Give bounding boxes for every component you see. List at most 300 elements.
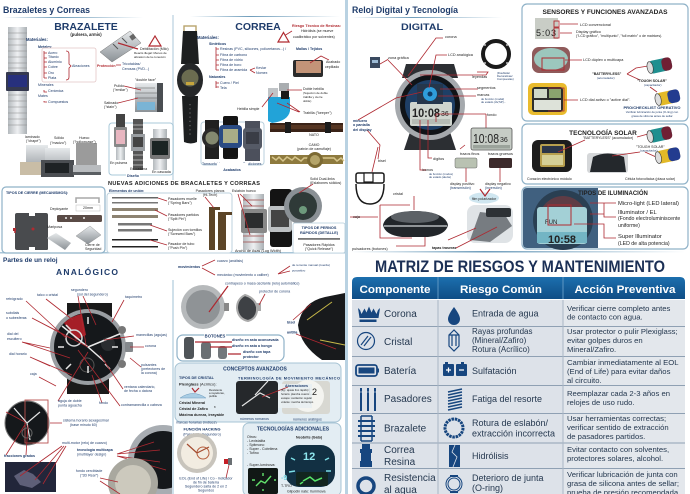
labels: analog watch parts: de fecha o datora	[124, 389, 152, 393]
text: Resistencia al agua: Resistencia	[384, 473, 436, 484]
leader lines: illumination	[574, 203, 616, 238]
text: debilitación	[134, 47, 169, 59]
icon: positive display	[450, 158, 477, 190]
table header: Componente	[360, 284, 430, 296]
icon: arabic numeral watch: 12	[307, 387, 317, 397]
heading: TIPOS DE ILUMINACIÓN	[578, 189, 648, 197]
icon: double face bracelet: Satinado	[104, 101, 118, 105]
icon: black resin watch	[177, 26, 203, 144]
icon: camo strap: CAMO	[309, 143, 320, 147]
diagram: alloys bracket	[42, 48, 121, 102]
text: materials list: Tricotaldas/	[122, 62, 140, 66]
table header: Acción Preventiva	[574, 284, 676, 296]
text: evitar: Evitar contacto con solventes,	[567, 445, 669, 454]
text: tipos de cristal: Cristal Mineral	[179, 401, 205, 405]
icon: NATO strap: NATO	[309, 133, 319, 137]
text: herramientas: verificar sentido de extracción	[567, 423, 669, 432]
text: materials list: Materiales:	[26, 37, 48, 42]
icon: blue strap with buckle: doble)	[303, 99, 311, 103]
icon: spring	[448, 389, 462, 410]
text: strap materials list: Nomex	[256, 71, 268, 75]
text: materials list: Cerosas (PVD...)	[122, 67, 149, 71]
text: tough solar label	[636, 145, 665, 157]
labels: digital watch parts: del display	[353, 128, 372, 132]
panel: diseño watches: En cascada	[152, 170, 171, 174]
icon: camo strap: (patrón de camuflaje)	[297, 147, 331, 151]
text: illumination types: uniforme)	[618, 223, 640, 229]
panel: finishes with three watches: Tamsorfoide	[202, 162, 222, 166]
icon: screw bars: ("Screwed Bars")	[168, 232, 195, 236]
icon: warning triangle	[149, 36, 161, 46]
icon: link watch	[131, 119, 145, 170]
text: verificar lubricación: grasa de silicona antes de sellar;	[567, 479, 679, 488]
labels: analog watch parts: escultero	[7, 337, 22, 341]
icon: multi-motor movement photo	[5, 441, 107, 492]
text: illumination types: (LED de alta potencia)	[618, 241, 670, 247]
icon: black digital watch	[202, 120, 222, 159]
icon: negative display: (inversión)	[485, 186, 502, 190]
panel: correa	[177, 21, 344, 172]
icon: butterfly clasp: Mariposa	[47, 225, 63, 229]
text: herramientas	[567, 414, 669, 441]
icon: case ring	[358, 478, 374, 494]
labels: digital watch parts: o pantalla	[353, 123, 371, 127]
text: rayas: Rayas profundas	[472, 327, 532, 336]
icon: duplex LCD watch	[532, 47, 624, 73]
icon: hacking watch	[177, 433, 232, 478]
text: movement tree: mecánico (movimiento o calibre)	[217, 273, 269, 277]
text: movement tree: cuarzo (análisis)	[217, 259, 243, 263]
analog leader lines	[22, 296, 144, 406]
text: materials list: Cerámica	[48, 89, 63, 93]
panel: analog watch anatomy	[4, 288, 345, 494]
heading: TIPOS DE CIERRE (MECANISMOS):	[6, 191, 68, 195]
icon: flat bars: (Hi-Tech)	[203, 193, 217, 197]
subheading: pulsera, armis: (pulsera, armis)	[70, 32, 102, 37]
labels: button designs: diseño con tapa	[243, 350, 271, 354]
heading: SENSORES Y FUNCIONES AVANZADAS	[542, 10, 668, 16]
icon: dark watch close-up: antilla	[287, 330, 298, 334]
panel: diseño watches: En pulsera	[110, 161, 127, 165]
text: reemplazar: relojes de uso rudo.	[567, 398, 635, 407]
text: strap materials list: Fibra de boro	[220, 63, 241, 67]
text: batteryless label: "BATTERYLESS" (acumulador)	[583, 136, 633, 140]
subheading: Elementos de unión:	[109, 189, 144, 193]
text: sulfatación: Sulfatación	[472, 366, 517, 376]
text: EOL: de fin de batería	[193, 480, 219, 484]
text: debilitación: Reacts illegal: Menos de	[134, 51, 167, 55]
icon: blue strap with buckle: trabilla y cierre	[303, 95, 323, 99]
text: strap materials list: Kevlar	[256, 66, 267, 70]
icon: 3D rear watch: fondo cerciblade	[76, 469, 102, 473]
icon: black rubber watch	[268, 189, 292, 247]
callout: aberraciones	[262, 384, 314, 408]
row: pasadores	[360, 388, 670, 411]
label: neobrite: Neobrite (Gato)	[296, 436, 323, 440]
icon: digital rectangular watch	[150, 129, 170, 170]
text: materials list: Compuestos	[48, 100, 68, 104]
icon: sexagesimal watch: sistema horario sexagesimal	[63, 418, 109, 422]
icon: illuminated watch photo	[523, 188, 598, 250]
heading: terminología: TERMINOLOGÍA DE MOVIMIENTO MECÁNICO	[238, 376, 340, 380]
icon: conventional LCD: ("LCD gráfico", "multipunto", "full matrix" o de matrices).	[576, 34, 662, 38]
icon: push pins: ("Push Pin")	[168, 246, 187, 250]
heading: BRAZALETE: BRAZALETE	[54, 21, 118, 33]
callout: aberraciones: (fig.: ajuste fino rápido)	[281, 388, 308, 392]
text: strap materials list: Sintéticos	[209, 42, 226, 46]
icon: battery	[356, 365, 379, 376]
labels: analog watch parts: retrógrado	[6, 297, 23, 301]
labels: analog watch parts: punta aguacha	[58, 404, 82, 408]
text: rayas	[472, 327, 532, 354]
panel: tecnologías adicionales	[243, 423, 341, 494]
text: EOL: Segundos	[198, 488, 214, 492]
icon: brushed strap end	[293, 56, 340, 77]
label: T-25: -9	[281, 475, 287, 482]
icon: chronograph watch	[50, 303, 133, 394]
text: hidrólisis: Hidrólisis	[472, 451, 509, 461]
icon: button photos	[184, 337, 241, 359]
icon: grey square watch	[243, 121, 262, 161]
text: batteryless label	[558, 134, 648, 152]
text: tough solar label: "TOUGH SOLAR"	[636, 145, 665, 149]
labels: case parts	[352, 192, 456, 251]
icon: conventional LCD: Display gráfico	[576, 30, 601, 34]
text: other technologies: Otros:	[247, 435, 257, 439]
table header	[352, 277, 685, 299]
text: other technologies: - Super-luminova:	[247, 463, 275, 467]
row: corona	[358, 304, 671, 325]
icon: screw bars: Sujeción con tornillos	[168, 228, 202, 232]
row: correa resina	[360, 444, 669, 468]
panel: tipos de cierre	[2, 187, 105, 253]
label: T-25: T-TRO	[281, 484, 292, 488]
row: cristal	[358, 327, 678, 354]
heading: Reloj Digital y Tecnología: Reloj Digital y Tecnología	[352, 5, 459, 15]
text: verificar cierre: de contacto con agua.	[567, 312, 643, 322]
heading: TECNOLOGÍAS ADICIONALES	[257, 424, 330, 432]
labels: analog watch parts: dial horario	[9, 352, 27, 356]
labels: digital watch parts: dígitos	[433, 157, 444, 161]
icon: round solid link watch	[284, 177, 341, 225]
panel: diseño watches: Diseño	[127, 174, 140, 178]
text: strap materials list: Tela	[220, 86, 227, 90]
text: strap materials list: Cuero / Piel	[220, 81, 239, 85]
panel: finishes with three watches	[201, 116, 264, 172]
text: tipos de cristal: 8	[214, 405, 216, 409]
labels: digital watch parts: LCD analógica	[448, 53, 474, 57]
text: EOL: Segundero salta de 2 en 2	[185, 484, 227, 488]
label: lug width: Ancho de Asas (Lug Width)	[235, 249, 282, 253]
labels: digital watch parts: leyendas	[472, 75, 487, 79]
icon: flat bars	[196, 189, 232, 250]
text: strap materials list: Fibra de carbono	[220, 53, 247, 57]
text: risk note	[284, 24, 341, 39]
icon: crystal circle	[358, 332, 374, 350]
icon: detail display: trazos finos	[460, 152, 480, 156]
icon: duplex LCD watch: LCD dúplex o multicapa	[583, 58, 624, 62]
text: checklist: Verificar lubricación de junta (O-ring) con	[626, 110, 679, 114]
text: cambiar: al circuito.	[567, 376, 602, 385]
icon: spring bars: Pasadores muelle	[168, 197, 197, 201]
text: materials list: Aleaciones	[72, 64, 90, 68]
text: Brazalete: Brazalete	[384, 424, 427, 434]
text: reemplazar: Reemplazar cada 2-3 años en	[567, 389, 670, 398]
icon: negative display	[485, 158, 512, 190]
callout: aberraciones: horario: plancha cuarzo	[281, 392, 310, 396]
text: tough solar	[637, 79, 667, 92]
icon: hollow link bracelet watch	[232, 189, 267, 250]
icon: bracelet links	[100, 31, 141, 62]
icon: caseback photo	[448, 205, 513, 248]
icon: arabic numeral watch: números arábigos	[293, 418, 322, 422]
callout: aberraciones: volante: marcha del tiempo	[281, 400, 314, 404]
text: Entrada de agua: Entrada de agua	[472, 308, 539, 318]
text: other technologies: - Lexistalita	[247, 439, 265, 443]
table header: Riesgo Común	[460, 284, 542, 296]
icon: case side view	[350, 196, 448, 246]
icon: sexagesimal watch: grados	[23, 454, 35, 458]
icon: camo strap	[270, 143, 344, 168]
labels: button designs: protector	[243, 355, 259, 359]
panel: digital watch anatomy	[350, 35, 514, 251]
labels: analog watch parts: (pretectores de	[141, 367, 165, 371]
icon: safety clasp	[76, 226, 101, 251]
icon: neobrite dial: 12	[303, 451, 315, 463]
icon: 3D rear watch: ("3D Rear")	[80, 474, 98, 478]
labels: analog watch parts: dial del	[7, 332, 19, 336]
labels: digital watch parts: de función (modal)	[481, 97, 504, 101]
text: materials list: Cobre	[48, 65, 58, 69]
panel: nuevas adiciones	[107, 177, 345, 253]
icon: split pins: ("Split Pin")	[168, 217, 186, 221]
labels: digital watch parts: fondo	[487, 113, 497, 117]
heading: ANALÓGICO: ANALÓGICO	[56, 266, 118, 277]
text: usar protector: evitar golpes duros en	[567, 336, 643, 345]
labels: analog watch parts: fondo	[99, 401, 108, 405]
text: Corona: Corona	[384, 309, 417, 320]
icon: photovoltaic cell	[587, 152, 675, 181]
panel: conceptos avanzados	[175, 363, 341, 424]
labels: button designs: diseño en asta aconcavada	[232, 338, 280, 342]
text: rayas: Rotura (Acrílico)	[472, 345, 530, 354]
icon: split pins	[112, 208, 199, 221]
row: batería	[356, 358, 679, 385]
labels: analog watch parts: (sol del segundero)	[77, 292, 108, 296]
icon: bracelet links	[358, 416, 375, 441]
text: usar protector: Mineral/Zafiro.	[567, 345, 616, 354]
icon: sexagesimal watch	[4, 400, 109, 458]
icon: warning triangle	[278, 32, 289, 42]
icon: multilayer watch: tecnología multicapa	[77, 448, 114, 452]
panel: tipos de pernos: ("Quick Release")	[305, 247, 333, 251]
text: risk note: Hidrólisis (se mueve	[301, 29, 333, 33]
text: materials list: Protección	[97, 64, 116, 68]
panel: finishes with three watches: Lexoth	[227, 156, 238, 160]
icon: flat bars: Pasadores planos	[196, 189, 225, 193]
icon: blue strap with buckle: Hebilla simple	[237, 107, 259, 111]
icon: solar module watch: Corazón electrónico módulo	[527, 177, 572, 181]
text: other technologies	[247, 435, 277, 467]
labels: digital watch parts: de función (modos)	[429, 172, 453, 176]
text: strap materials list: Fibra de aramida	[220, 68, 247, 72]
text: rotura	[472, 418, 555, 438]
text: other technologies: - Tofino	[247, 451, 259, 455]
icon: laminated, solid and hollow bracelets: laminado	[25, 135, 40, 139]
icon: deployante strap: Deployante	[50, 207, 68, 211]
text: cambiar: Cambiar inmediatamente al EOL	[567, 358, 679, 367]
icon: positive display: (transmisión)	[450, 186, 471, 190]
text: tipos de cristal: pulible	[209, 394, 218, 398]
icon: bezel ring	[483, 41, 509, 67]
labels: button designs: diseño en asta a hongo	[232, 344, 273, 348]
labels: analog watch parts: o subesferas	[6, 316, 27, 320]
icon: sexagesimal watch: (base minuto 60)	[70, 423, 97, 427]
text: other technologies: - Spitmono	[247, 443, 264, 447]
labels: analog watch parts	[6, 288, 167, 408]
heading: TECNOLOGÍA SOLAR	[569, 128, 637, 137]
icon: superluminova dial	[248, 468, 278, 494]
panel: tipos de iluminación	[522, 187, 688, 250]
panel: función hacking	[175, 424, 241, 494]
text: verificar lubricación: Verificar lubricación de junta con	[567, 470, 678, 479]
icon: safety clasp: Seguridad	[85, 247, 101, 251]
text: materials list: Plata	[48, 76, 56, 80]
labels: case parts: caja	[353, 215, 361, 219]
text: batteryless	[592, 66, 648, 80]
text: Pasadores: Pasadores	[384, 394, 432, 405]
heading: FUNCIÓN HACKING	[184, 426, 220, 432]
panel: brazalete	[6, 21, 173, 178]
labels: case parts: cristal	[393, 192, 403, 196]
icon: butterfly clasp shape	[13, 213, 48, 250]
icon: detail display: 10:08	[473, 131, 499, 146]
icon: roman numeral watch	[236, 381, 278, 421]
icon: active dial watch: LCD dial activo o "active dial".	[580, 98, 630, 102]
panel: tecnología solar	[522, 124, 688, 184]
panel: finishes with three watches: Acabados	[223, 168, 241, 172]
callout: aberraciones: escape: oscilación regular	[281, 396, 312, 400]
text: strap materials list: Naturales	[209, 75, 225, 79]
icon: double face bracelet: ("emilar")	[113, 88, 128, 92]
icon: blue strap with buckle	[237, 83, 332, 123]
panel: diseño watches	[109, 114, 173, 178]
icon: detail display	[460, 128, 513, 156]
icon: pink dial watch	[114, 114, 127, 160]
labels: digital watch parts: bisel	[378, 159, 386, 163]
icon: photovoltaic cell: Célula fotovoltaica (placa solar)	[625, 177, 675, 181]
icon: brushed strap end: Acabado	[326, 60, 340, 64]
icon: laminated, solid and hollow bracelets: ("hollowcase")	[73, 140, 96, 144]
labels: digital watch parts: marcas	[477, 93, 490, 97]
icon: positive display: display positivo	[450, 182, 474, 186]
text: fatiga: Fatiga del resorte	[472, 394, 542, 404]
icon: arabic numeral watch	[282, 380, 330, 422]
panel: tipos de pernos	[293, 223, 345, 253]
labels: analog watch parts: subdials	[6, 311, 19, 315]
labels: case parts: tapas traseras	[432, 246, 456, 250]
icon: split pins: Pasadores partidos	[168, 213, 199, 217]
labels: button designs	[232, 338, 280, 359]
text: materials list: Oro	[48, 71, 54, 75]
text: tipos de cristal: marcas horarias (índices)	[176, 420, 217, 424]
text: rayas: (Mineral/Zafiro)	[472, 336, 527, 345]
icon: watch back	[181, 285, 229, 329]
text: illumination types	[618, 201, 680, 247]
text: batteryless: "BATTERYLESS"	[592, 72, 622, 76]
heading: CORREA: CORREA	[235, 21, 281, 33]
text: batteryless: (acumulador)	[597, 76, 615, 80]
icon: cracked strap	[449, 445, 460, 467]
row: resistencia al agua	[358, 470, 680, 494]
text: materials list: Mates	[38, 94, 48, 98]
icon: spring bars: ("Spring Bars")	[168, 201, 192, 205]
icon: push pins: Pasador de tubo	[168, 242, 194, 246]
text: evitar: protectores solares, alcohol.	[567, 454, 663, 463]
subheading: (Parada de Segundero)	[183, 432, 221, 436]
labels: analog watch parts: caja	[30, 372, 37, 376]
icon: water drop	[448, 307, 460, 325]
text: risk note: Riesgo Técnico de Resinas:	[292, 24, 341, 28]
text: tough solar label: (capacitador)	[640, 148, 658, 152]
icon: graphic zone	[370, 57, 380, 68]
icon: main digital watch	[395, 64, 465, 150]
icon: dark watch close-up	[287, 293, 345, 360]
text: movement tree: movimientos	[178, 265, 200, 269]
icon: crown protector: protector de corona	[259, 290, 290, 294]
icon: conventional LCD: 5:03	[536, 28, 556, 38]
text: tipos de cristal: Máxima dureza, irrayable	[179, 413, 224, 417]
text: tipos de cristal: a rayaduras,	[209, 391, 225, 395]
text: Correa Resina: Resina	[384, 457, 416, 468]
heading: CONCEPTOS AVANZADOS	[223, 366, 288, 372]
text: verificar cierre: Verificar cierre completo antes	[567, 304, 671, 313]
text: tipos de cristal: Cristal de Zafiro	[179, 407, 209, 411]
text: movement tree: de remonte manual (cuerda)	[292, 263, 330, 267]
labels: digital watch parts: segmentos	[477, 86, 496, 90]
text: materials list: Minerales	[38, 83, 54, 87]
heading: Partes de un reloj: Partes de un reloj	[3, 257, 58, 264]
text: tipos de cristal	[176, 376, 225, 424]
icon: crown	[358, 306, 380, 322]
labels: digital watch parts	[353, 35, 514, 179]
icon: pins	[360, 388, 376, 411]
labels: case parts: pulsadores (botones)	[352, 247, 388, 251]
panel: diseño watches: En cadena	[130, 167, 147, 171]
icon: safety clasp: Cierre de	[85, 243, 100, 247]
icon: 3D rear watch	[76, 458, 158, 494]
text: illumination types: Illuminator / EL	[618, 210, 657, 216]
icon: multilayer watch: (multilayer design)	[77, 452, 106, 456]
text: usar protector: Usar protector o pulir Plexiglass;	[567, 327, 678, 336]
icon: laminated, solid and hollow bracelets	[20, 135, 101, 177]
labels: digital watch parts: de estado (alerta)	[429, 175, 451, 179]
icon: deployante strap	[50, 198, 102, 222]
text: movement tree: contrapeso o masa oscilante (reloj automático)	[225, 282, 300, 286]
icon: conventional LCD	[535, 18, 662, 39]
icon: hollow link bracelet watch: Eslabón hueco	[232, 189, 256, 193]
text: cambiar: (End of Life) para evitar daños	[567, 367, 671, 376]
icon: multi-motor movement photo: multi-motor (reloj de cuarzo)	[62, 441, 107, 445]
icon: blue strap with buckle: Doble hebilla	[303, 87, 324, 91]
text: strap materials list: Materiales:	[197, 35, 219, 40]
icon: battery solar	[654, 89, 681, 107]
icon: blue strap with buckle: Trabilla ("keeper")	[303, 111, 332, 115]
labels: analog watch parts: talco o cristal	[37, 293, 58, 297]
icon: strap	[360, 444, 372, 467]
text: herramientas: Usar herramientas correctas;	[567, 414, 666, 423]
text: checklist: grasa de silicona antes de sellar	[631, 114, 673, 118]
